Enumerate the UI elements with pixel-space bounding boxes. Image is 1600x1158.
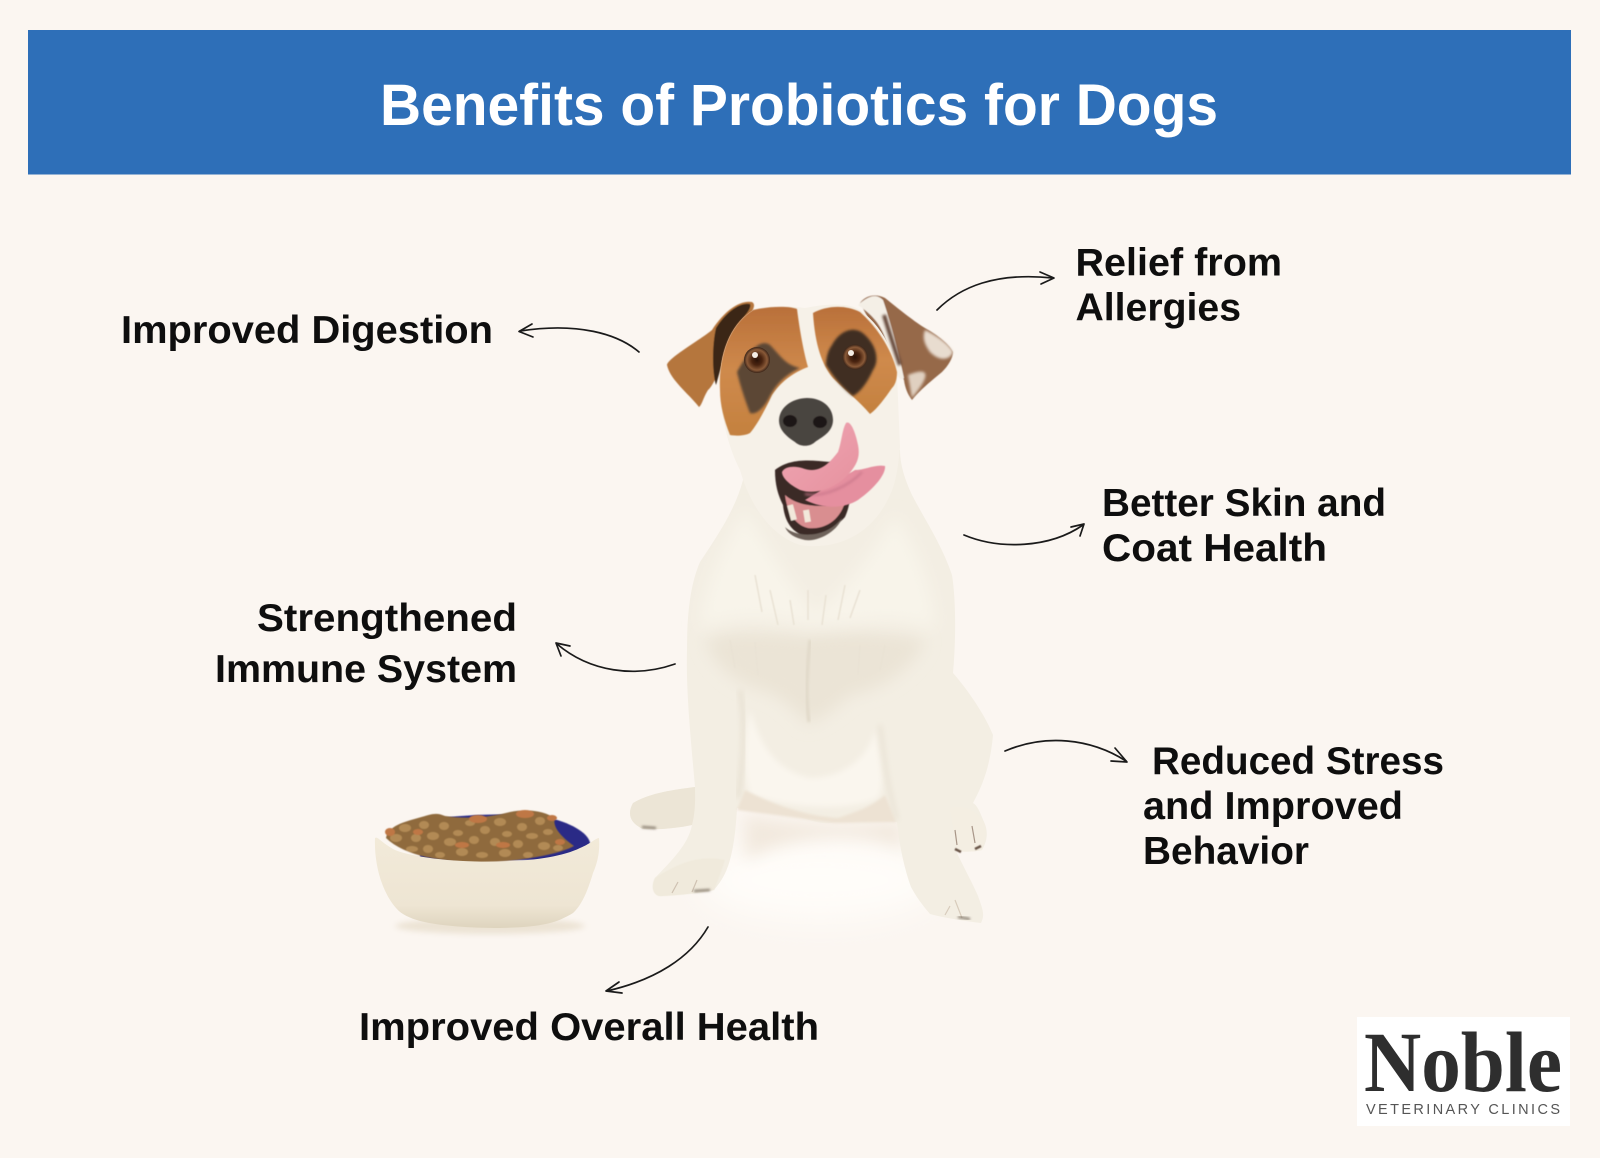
- tan patch: left: [720, 307, 808, 436]
- logo: Noble Veterinary Clinics: Noble: [1364, 1014, 1562, 1110]
- eyes: [744, 344, 868, 373]
- floor shadow and glow: [700, 840, 940, 920]
- label: relief from allergies: [1076, 242, 1282, 330]
- arrow: to better skin and coat health: [964, 524, 1084, 545]
- left ear: [667, 302, 754, 407]
- label: improved digestion: Improved Digestion: [121, 309, 493, 352]
- bowl body: [375, 838, 599, 928]
- label: better skin and coat health: Coat Health: [1102, 527, 1327, 570]
- tan patch: right: [813, 307, 897, 414]
- label: strengthened immune system: [215, 597, 517, 691]
- dog body: [630, 450, 993, 923]
- food bowl: [375, 810, 599, 934]
- label: better skin and coat health: Better Skin and: [1102, 482, 1386, 525]
- kibble: [385, 810, 574, 862]
- title: Benefits of Probiotics for Dogs: [380, 73, 1218, 138]
- head: [720, 304, 900, 546]
- title banner: [28, 30, 1571, 174]
- label: reduced stress and improved behavior: Behavior: [1143, 830, 1309, 873]
- label: reduced stress and improved behavior: Reduced Stress: [1152, 740, 1444, 783]
- nose: [779, 398, 833, 446]
- dog: [630, 296, 993, 923]
- arrow: to improved overall health: [606, 927, 708, 993]
- paws: [630, 787, 985, 919]
- tongue: [782, 422, 885, 507]
- label: improved overall health: Improved Overall Health: [359, 1006, 819, 1049]
- arrow: to relief from allergies: [937, 272, 1054, 310]
- label: relief from allergies: Allergies: [1076, 286, 1241, 330]
- right ear: [858, 296, 953, 400]
- label: relief from allergies: Relief from: [1076, 242, 1282, 284]
- label: better skin and coat health: [1102, 482, 1386, 570]
- arrow: to strengthened immune system: [556, 643, 675, 671]
- label: reduced stress and improved behavior: [1143, 740, 1444, 873]
- bowl interior: [420, 815, 590, 860]
- label: reduced stress and improved behavior: and Improved: [1143, 785, 1403, 828]
- arrow: to improved digestion: [519, 324, 639, 352]
- mouth: [775, 460, 850, 540]
- label: strengthened immune system: Strengthened: [257, 597, 517, 640]
- logo: Noble Veterinary Clinics: VETERINARY CLINICS: [1366, 1102, 1560, 1118]
- chest and belly shading: [700, 510, 935, 823]
- arrow: to reduced stress: [1005, 741, 1127, 762]
- label: strengthened immune system: Immune System: [215, 648, 517, 691]
